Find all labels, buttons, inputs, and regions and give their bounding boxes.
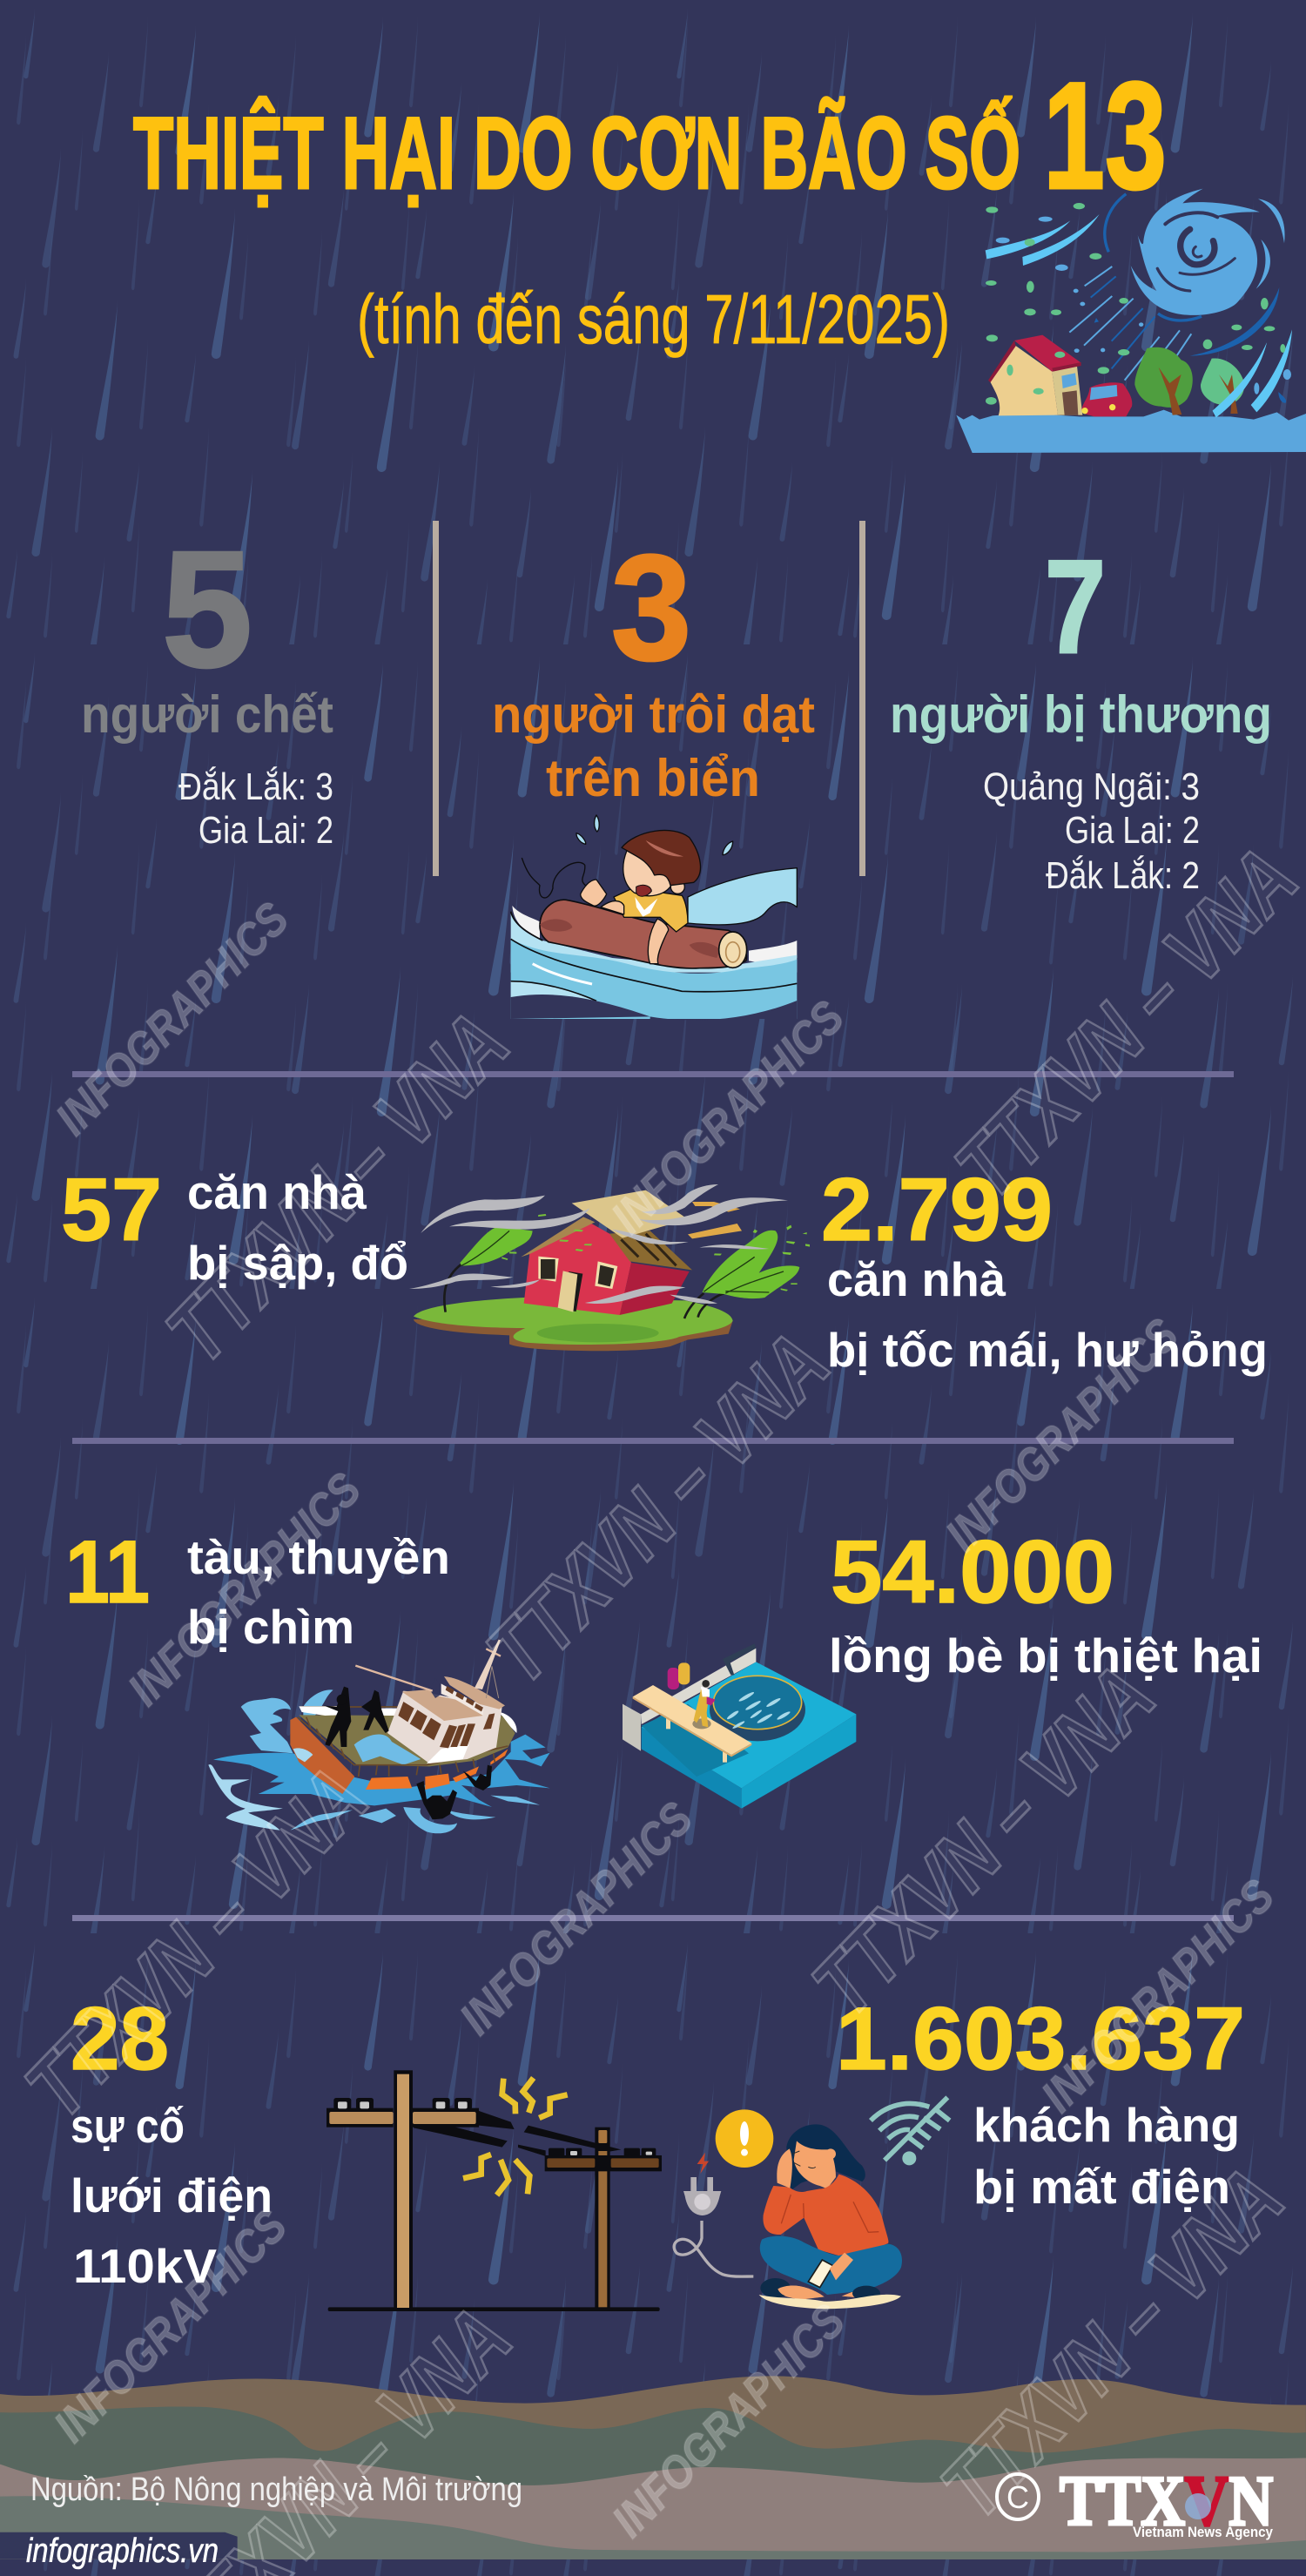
injured number: 7 — [1045, 533, 1106, 681]
injured label: người bị thương — [890, 685, 1272, 744]
column: injured — [890, 533, 1272, 897]
injured detail: Gia Lai: 2 — [1065, 809, 1200, 852]
icon: wifi off — [871, 2097, 950, 2163]
footer hills — [0, 2376, 1306, 2559]
icon: broken power poles — [326, 2070, 662, 2311]
missing number: 3 — [611, 524, 691, 691]
watermarks: INFOGRAPHICS — [44, 2200, 297, 2452]
house — [990, 346, 1058, 415]
stat: damaged roofs: 2.799 — [821, 1160, 1053, 1259]
stat: collapsed houses — [61, 1160, 408, 1290]
stat: collapsed houses: căn nhà — [187, 1165, 367, 1219]
deaths detail: Gia Lai: 2 — [199, 809, 333, 852]
missing label: người trôi dạt — [492, 685, 815, 744]
injured detail: Đắk Lắk: 2 — [1046, 854, 1200, 897]
watermarks — [7, 829, 1306, 2576]
stat: grid incidents — [71, 1989, 273, 2293]
stat: customers without power: khách hàng — [973, 2098, 1240, 2152]
stat: sunken boats — [65, 1522, 450, 1654]
injured detail: Quảng Ngãi: 3 — [983, 765, 1200, 808]
watermarks: INFOGRAPHICS — [118, 1463, 371, 1716]
deaths detail: Đắk Lắk: 3 — [178, 765, 333, 808]
column: missing at sea — [492, 524, 815, 807]
stat: fish cages — [829, 1522, 1262, 1682]
website: infographics.vn — [26, 2532, 219, 2570]
icon: boy on a log — [511, 815, 797, 1020]
stat: collapsed houses: 57 — [61, 1160, 162, 1259]
missing label — [492, 685, 815, 807]
stat: sunken boats: 11 — [65, 1522, 150, 1622]
trees — [1134, 347, 1193, 408]
watermarks: INFOGRAPHICS — [602, 991, 854, 1244]
car — [1081, 382, 1132, 416]
icon: storm illustration — [956, 189, 1306, 453]
title: 13 — [1043, 51, 1167, 221]
deaths label: người chết — [81, 685, 333, 744]
injured detail — [983, 765, 1200, 897]
subtitle: (tính đến sáng 7/11/2025) — [357, 280, 950, 358]
stat: grid incidents: sự cố — [71, 2099, 185, 2153]
icon: woman without power — [674, 2109, 902, 2309]
icon: house in storm — [409, 1184, 810, 1351]
stat: grid incidents: lưới điện — [71, 2168, 273, 2222]
icon: aquaculture cage — [623, 1643, 856, 1809]
missing label: trên biển — [546, 749, 760, 807]
deaths number: 5 — [162, 517, 252, 702]
column: deaths — [81, 517, 333, 852]
stat: damaged roofs — [821, 1160, 1268, 1377]
watermarks: TTXVN – VNA — [794, 1647, 1173, 2034]
watermarks: INFOGRAPHICS — [450, 1792, 703, 2045]
stat: grid incidents: 110kV — [73, 2239, 217, 2293]
logo: TTXVN: TTXVN — [1060, 2461, 1273, 2540]
source note: Nguồn: Bộ Nông nghiệp và Môi trường — [30, 2471, 522, 2508]
watermarks: INFOGRAPHICS — [46, 893, 299, 1145]
stat: sunken boats: tàu, thuyền — [187, 1530, 450, 1584]
stat: grid incidents: 28 — [71, 1989, 169, 2088]
icon: sinking boat — [208, 1640, 550, 1833]
logo: TTXVN: C — [1006, 2479, 1029, 2515]
stat: customers without power: 1.603.637 — [836, 1989, 1245, 2088]
logo: TTXVN: Vietnam News Agency — [1133, 2524, 1273, 2540]
title — [133, 51, 1167, 221]
stat: customers without power: bị mất điện — [973, 2160, 1230, 2214]
watermarks: TTXVN – VNA — [148, 994, 527, 1381]
watermarks: TTXVN – VNA — [468, 1314, 847, 1702]
watermarks: INFOGRAPHICS — [603, 2295, 855, 2547]
watermarks: INFOGRAPHICS — [936, 1309, 1188, 1561]
stat: damaged roofs: bị tốc mái, hư hỏng — [827, 1323, 1268, 1377]
stat: fish cages: 54.000 — [831, 1522, 1114, 1622]
stat: fish cages: lồng bè bị thiệt hại — [829, 1629, 1262, 1682]
watermarks: TTXVN – VNA — [7, 1749, 386, 2136]
stat: collapsed houses: bị sập, đổ — [187, 1236, 408, 1290]
stat: customers without power — [836, 1989, 1245, 2214]
stat: damaged roofs: căn nhà — [827, 1252, 1006, 1306]
stat: sunken boats: bị chìm — [187, 1600, 354, 1654]
deaths detail — [178, 765, 333, 852]
